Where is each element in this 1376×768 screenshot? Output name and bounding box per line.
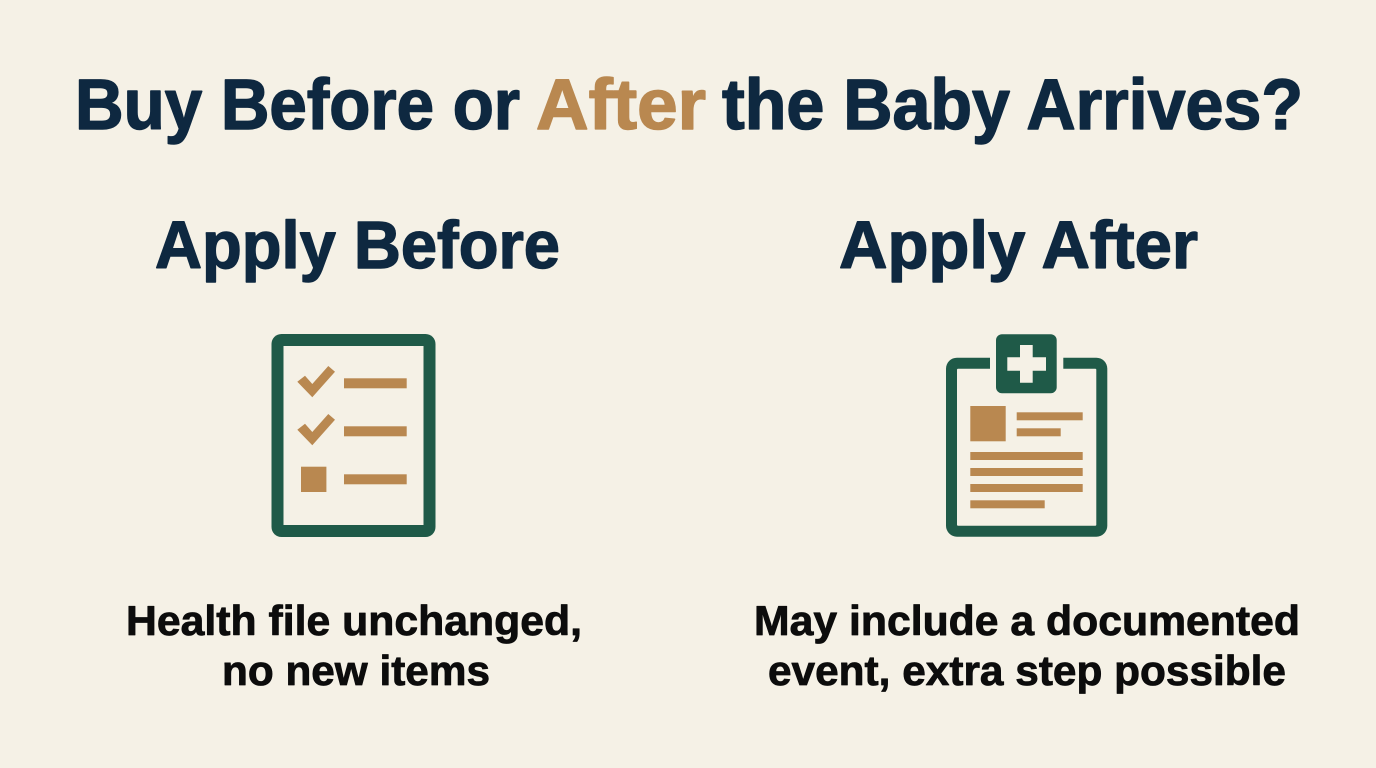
- title: [75, 66, 1303, 145]
- heading: apply after: Apply After: [839, 208, 1198, 283]
- icon: medical clipboard: [946, 334, 1107, 537]
- panel: apply after: [754, 208, 1300, 694]
- description: apply before: Health file unchanged,: [126, 597, 582, 644]
- description: apply after: [754, 597, 1300, 694]
- description: apply after: event, extra step possible: [768, 647, 1286, 694]
- title: the Baby Arrives?: [722, 66, 1303, 145]
- icon: checklist: [272, 334, 436, 537]
- panel: apply before: [126, 208, 582, 694]
- description: apply before: [126, 597, 582, 694]
- description: apply after: May include a documented: [754, 597, 1300, 644]
- title: After: [536, 66, 706, 145]
- heading: apply before: Apply Before: [155, 208, 560, 283]
- title: Buy Before or: [75, 66, 520, 145]
- description: apply before: no new items: [222, 647, 490, 694]
